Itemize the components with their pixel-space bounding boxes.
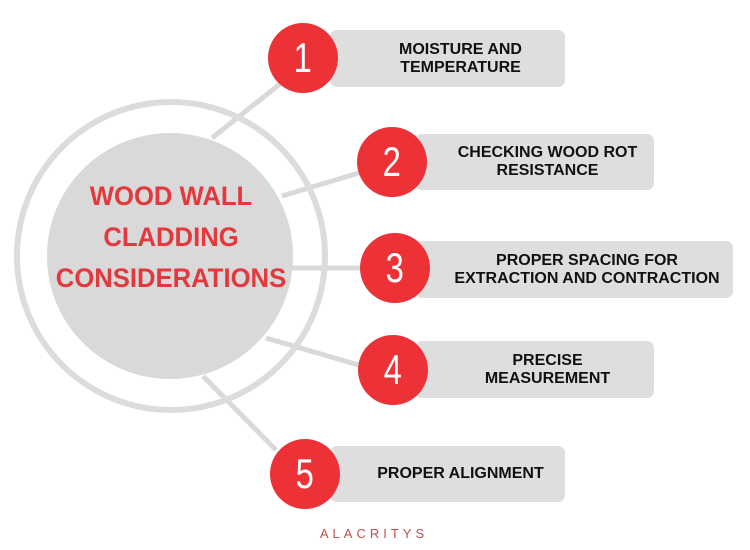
connector lines (203, 84, 362, 450)
item 5 box: PROPER ALIGNMENT (377, 465, 544, 482)
item 2 box (415, 134, 654, 190)
item 5 box (330, 446, 565, 502)
item 1 number (268, 23, 338, 93)
title: CLADDING (103, 222, 239, 252)
item 4 box: PRECISE (512, 352, 583, 368)
item 2 box: RESISTANCE (497, 162, 598, 179)
inner circle (47, 133, 293, 379)
item 1 box: MOISTURE AND (399, 40, 522, 58)
item 4 box: MEASUREMENT (485, 370, 610, 386)
item 1 number: 1 (294, 34, 312, 81)
title (56, 181, 286, 293)
item 5 number (270, 439, 340, 509)
footer brand: ALACRITYS (320, 526, 428, 541)
item 3 box: PROPER SPACING FOR (496, 252, 678, 268)
item 3 box (415, 241, 733, 298)
title: CONSIDERATIONS (56, 263, 286, 293)
item 4 box (415, 341, 654, 398)
item 3 number (360, 233, 430, 303)
item 1 box (330, 30, 565, 87)
item 4 number (358, 335, 428, 405)
item 2 number (357, 127, 427, 197)
item 3 box: EXTRACTION AND CONTRACTION (454, 270, 720, 286)
outer ring (17, 102, 325, 410)
item 4 number: 4 (384, 346, 402, 393)
item 5 number: 5 (296, 450, 314, 497)
item 3 number: 3 (386, 244, 404, 291)
title: WOOD WALL (90, 181, 252, 211)
item 2 box: CHECKING WOOD ROT (458, 144, 637, 161)
item 1 box: TEMPERATURE (400, 58, 521, 76)
item 2 number: 2 (383, 138, 401, 185)
